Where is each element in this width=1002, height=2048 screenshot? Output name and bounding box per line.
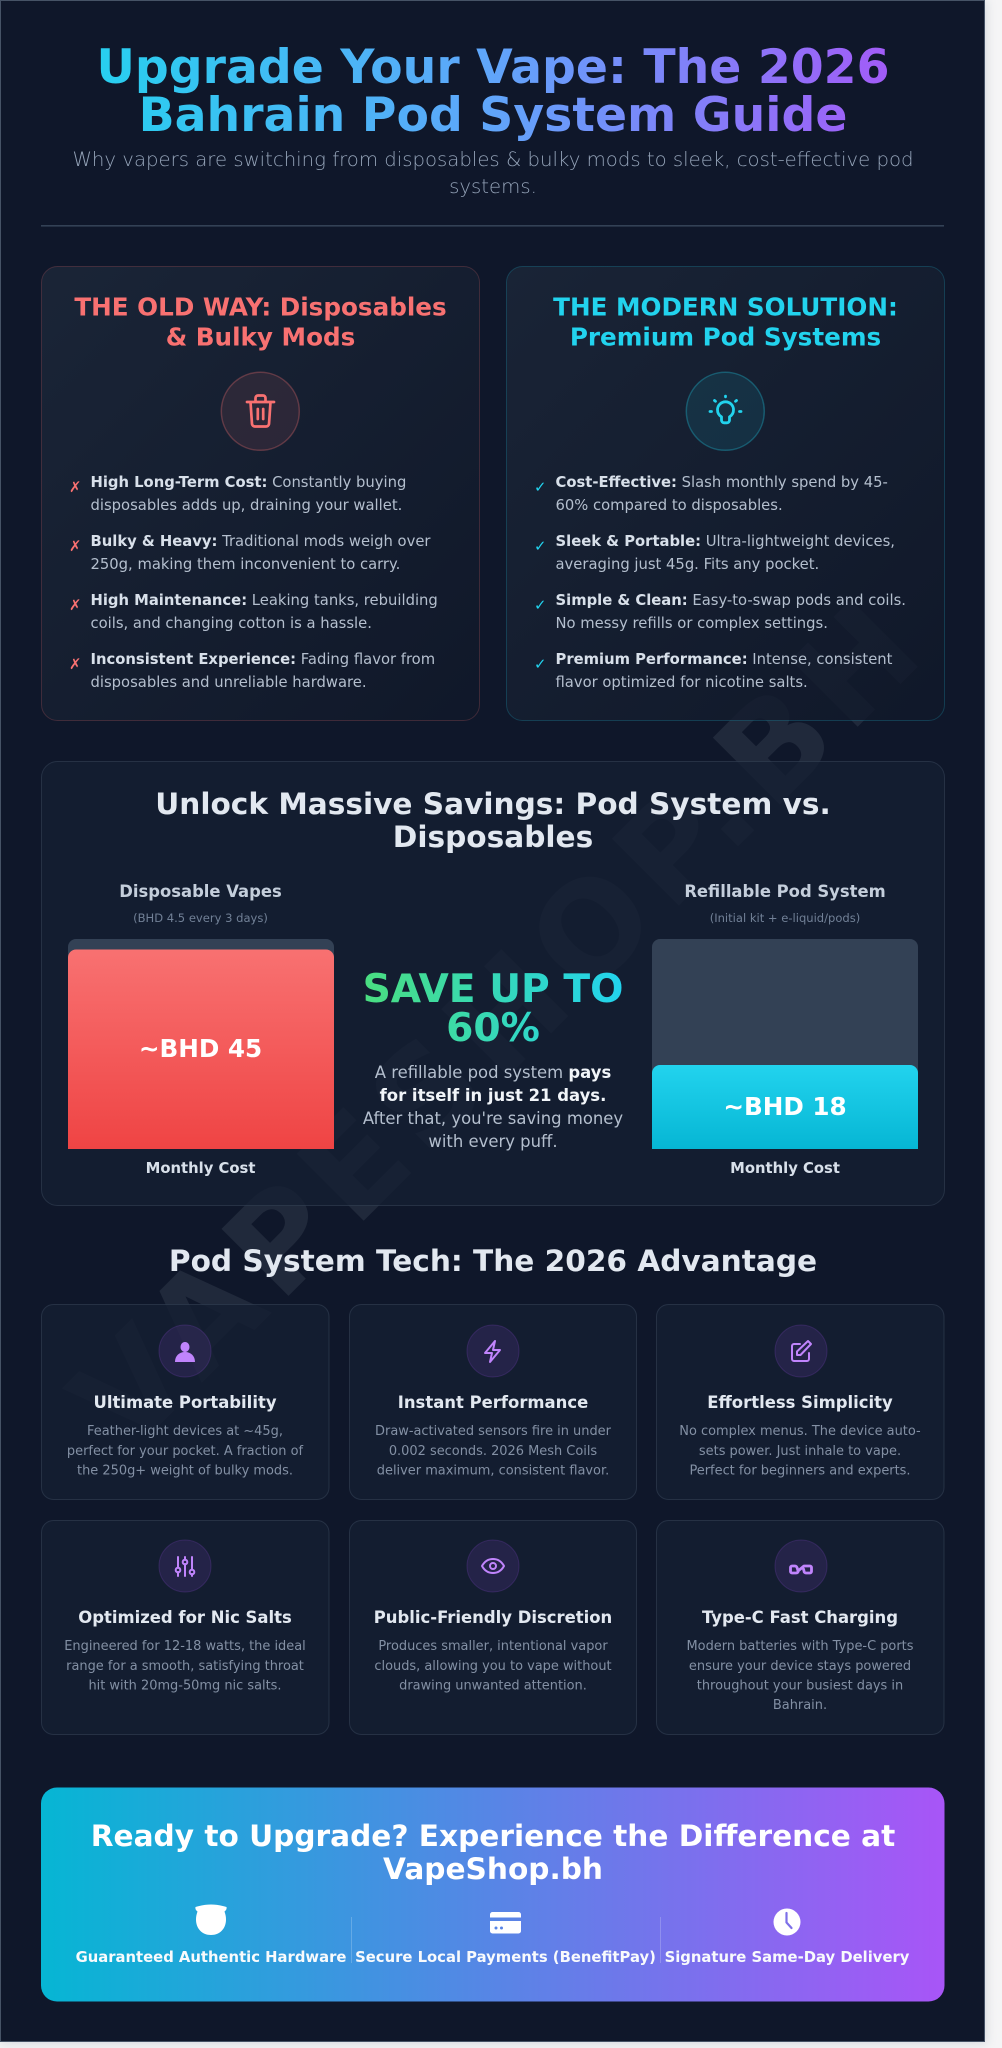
description: Perfect for beginners and experts. [689, 1464, 911, 1478]
chart: refillable pod system bar: (Initial kit + e-liquid/pods) [710, 911, 860, 925]
description: No complex menus. The device auto- [679, 1424, 921, 1439]
text: payments: Secure Local Payments (BenefitPay) [355, 1949, 656, 1966]
text: authentic: Guaranteed Authentic Hardware [76, 1949, 346, 1966]
description: clouds, allowing you to vape without [374, 1659, 612, 1674]
icon: eye [467, 1540, 519, 1592]
icon: person [159, 1325, 211, 1377]
title: Bahrain Pod System Guide [139, 88, 847, 143]
card: instant performance [350, 1304, 636, 1500]
watermark: VAPESHOP.BH [43, 565, 956, 1478]
heading: modern solution: THE MODERN SOLUTION: [553, 293, 898, 322]
heading: old way [74, 293, 447, 352]
description: ensure your device stays powered [689, 1659, 911, 1674]
list: old way drawbacks: ✗ [69, 538, 81, 555]
chart: refillable pod system bar: Refillable Pod System [684, 882, 886, 901]
icon: sliders [159, 1540, 211, 1592]
heading: savings: Disposables [393, 820, 593, 854]
description: Produces smaller, intentional vapor [378, 1639, 608, 1654]
heading: old way: & Bulky Mods [166, 323, 355, 352]
list: old way drawbacks: ✗ [69, 656, 81, 673]
icon: edit [775, 1325, 827, 1377]
chart: refillable pod system bar: ~BHD 18 [723, 1092, 847, 1121]
chart: refillable pod system bar [652, 882, 918, 1177]
list: modern benefits: No messy refills or complex settings. [556, 615, 828, 632]
card: public-friendly discretion: Public-Friendly Discretion [374, 1608, 612, 1627]
description: 0.002 seconds. 2026 Mesh Coils [389, 1444, 597, 1459]
icon: bolt [467, 1325, 519, 1377]
subtitle: systems. [449, 175, 537, 198]
list: modern benefits: flavor optimized for nicotine salts. [556, 674, 808, 691]
description [375, 1424, 612, 1478]
list: modern benefits: Premium Performance: Intense, consistent [556, 651, 893, 668]
chart: disposable vapes bar: (BHD 4.5 every 3 days) [133, 911, 268, 925]
card: type-c fast charging [656, 1520, 944, 1734]
list: old way drawbacks: disposables and unreliable hardware. [90, 674, 367, 691]
description: Modern batteries with Type-C ports [687, 1639, 914, 1654]
title: Upgrade Your Vape: The 2026 [96, 40, 890, 95]
callout: save up to 60%: for itself in just 21 days. [380, 1086, 606, 1105]
subtitle: Why vapers are switching from disposables & bulky mods to sleek, cost-effective pod [72, 148, 914, 171]
subtitle [72, 148, 914, 198]
heading: savings: Unlock Massive Savings: Pod System vs. [155, 787, 831, 821]
chart: disposable vapes bar: ~BHD 45 [139, 1034, 262, 1063]
description: Draw-activated sensors fire in under [375, 1424, 612, 1439]
list: modern benefits: ✓ [534, 597, 546, 614]
description [687, 1639, 914, 1713]
list: old way drawbacks: High Maintenance: Leaking tanks, rebuilding [90, 592, 438, 609]
icon: shield [195, 1904, 227, 1935]
description [374, 1639, 612, 1694]
card: ultimate portability [42, 1304, 329, 1500]
list: modern benefits: ✓ [534, 538, 546, 555]
card: optimized for nic salts: Optimized for Nic Salts [78, 1608, 292, 1627]
card: type-c fast charging: Type-C Fast Charging [702, 1608, 898, 1627]
heading: modern solution [553, 293, 898, 352]
callout: save up to 60%: with every puff. [428, 1132, 558, 1151]
callout: save up to 60%: A refillable pod system pays [375, 1063, 611, 1082]
title [96, 40, 890, 143]
panel: the old way [42, 266, 480, 720]
list: old way drawbacks: Bulky & Heavy: Traditional mods weigh over [90, 533, 431, 550]
list: old way drawbacks: High Long-Term Cost: Constantly buying [90, 474, 406, 491]
list: old way drawbacks: ✗ [69, 479, 81, 496]
list: modern benefits: Cost-Effective: Slash monthly spend by 45- [556, 474, 888, 491]
card: ultimate portability: Ultimate Portability [93, 1393, 277, 1412]
list: old way drawbacks [69, 474, 438, 691]
card: effortless simplicity: Effortless Simplicity [707, 1393, 893, 1412]
card: effortless simplicity [656, 1304, 944, 1500]
list: old way drawbacks: ✗ [69, 597, 81, 614]
heading: cta: VapeShop.bh [383, 1852, 603, 1886]
description: throughout your busiest days in [697, 1678, 903, 1694]
chart: refillable pod system bar: Monthly Cost [730, 1160, 840, 1177]
panel: call to action [41, 1788, 944, 2002]
description [67, 1424, 304, 1478]
description: range for a smooth, satisfying throat [66, 1659, 304, 1674]
description: deliver maximum, consistent flavor. [377, 1464, 609, 1478]
heading: cta: Ready to Upgrade? Experience the Difference at [91, 1819, 895, 1853]
description [679, 1424, 921, 1478]
heading: old way: THE OLD WAY: Disposables [74, 293, 447, 322]
card: optimized for nic salts [42, 1520, 329, 1734]
heading: savings [155, 787, 831, 854]
callout: save up to 60%: SAVE UP TO [363, 967, 623, 1012]
callout: save up to 60% [363, 967, 623, 1151]
list: old way drawbacks: 250g, making them inconvenient to carry. [90, 556, 400, 573]
list: old way drawbacks: Inconsistent Experience: Fading flavor from [90, 651, 435, 668]
list: modern benefits: averaging just 45g. Fits any pocket. [556, 556, 819, 573]
chart: disposable vapes bar [68, 882, 334, 1177]
icon: trash [221, 372, 299, 450]
text: delivery: Signature Same-Day Delivery [665, 1949, 910, 1966]
list: modern benefits: ✓ [534, 656, 546, 673]
description [64, 1639, 306, 1694]
card: instant performance: Instant Performance [398, 1393, 588, 1412]
list: modern benefits: Sleek & Portable: Ultra-lightweight devices, [556, 533, 895, 550]
description: hit with 20mg-50mg nic salts. [88, 1678, 282, 1694]
list: old way drawbacks: coils, and changing cotton is a hassle. [90, 615, 372, 632]
icon: type-c link [775, 1540, 827, 1592]
card: public-friendly discretion [350, 1520, 636, 1734]
description: sets power. Just inhale to vape. [699, 1444, 901, 1459]
heading: modern solution: Premium Pod Systems [570, 323, 881, 352]
panel: the modern solution [506, 266, 944, 720]
list: modern benefits: Simple & Clean: Easy-to-swap pods and coils. [556, 592, 906, 609]
chart: disposable vapes bar: Disposable Vapes [119, 882, 282, 901]
heading: cta [91, 1819, 895, 1886]
description: Bahrain. [773, 1698, 827, 1713]
callout: save up to 60%: After that, you're saving money [363, 1109, 623, 1128]
description: drawing unwanted attention. [399, 1678, 587, 1694]
description: Feather-light devices at ~45g, [87, 1424, 283, 1439]
list: modern benefits: ✓ [534, 479, 546, 496]
description: the 250g+ weight of bulky mods. [77, 1464, 293, 1478]
list: old way drawbacks: disposables adds up, draining your wallet. [90, 497, 402, 514]
icon: lightbulb [686, 372, 764, 450]
list: modern benefits [534, 474, 906, 691]
callout: save up to 60%: 60% [446, 1006, 540, 1051]
description: Engineered for 12-18 watts, the ideal [64, 1639, 306, 1654]
heading: tech section: Pod System Tech: The 2026 Advantage [169, 1244, 817, 1278]
list: modern benefits: 60% compared to disposables. [556, 497, 783, 514]
icon: clock [774, 1908, 800, 1936]
description: perfect for your pocket. A fraction of [67, 1444, 304, 1459]
panel: savings comparison [42, 762, 944, 1206]
chart: disposable vapes bar: Monthly Cost [146, 1160, 255, 1177]
icon: card [490, 1912, 521, 1934]
